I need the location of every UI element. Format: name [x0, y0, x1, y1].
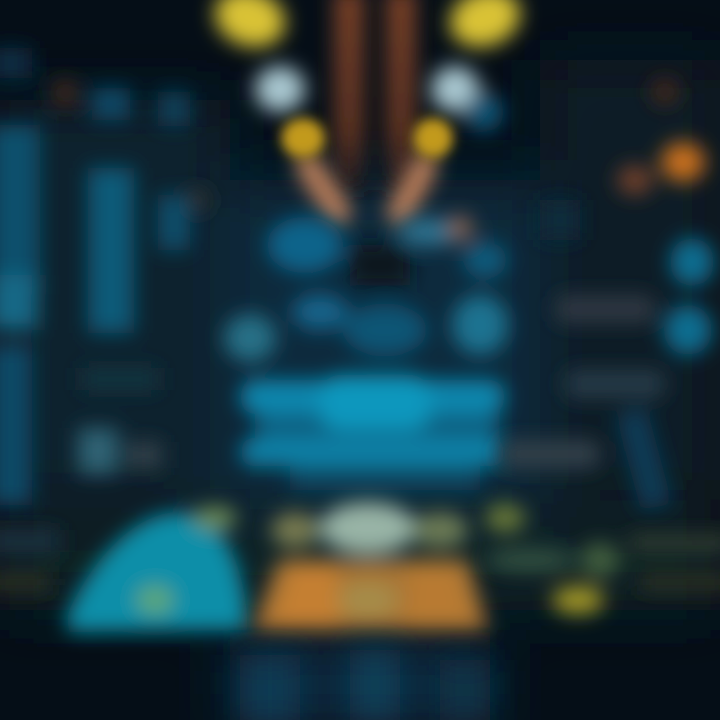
panel: bottom left teal dome — [65, 506, 248, 632]
panel: right side elements — [500, 78, 714, 511]
icon: small yellow lights — [281, 118, 453, 158]
floor reflections — [240, 650, 490, 720]
brown vertical beams — [334, 0, 416, 190]
panel: left blue columns — [0, 48, 209, 505]
icon: top yellow lights — [207, 0, 528, 57]
panel: central blue stack — [224, 215, 508, 490]
icon: pale lamps — [255, 66, 504, 132]
panel: bottom centre orange platform — [252, 502, 488, 630]
peach diagonal arms — [308, 165, 425, 212]
panel: bottom right yellow-green details — [0, 504, 720, 614]
